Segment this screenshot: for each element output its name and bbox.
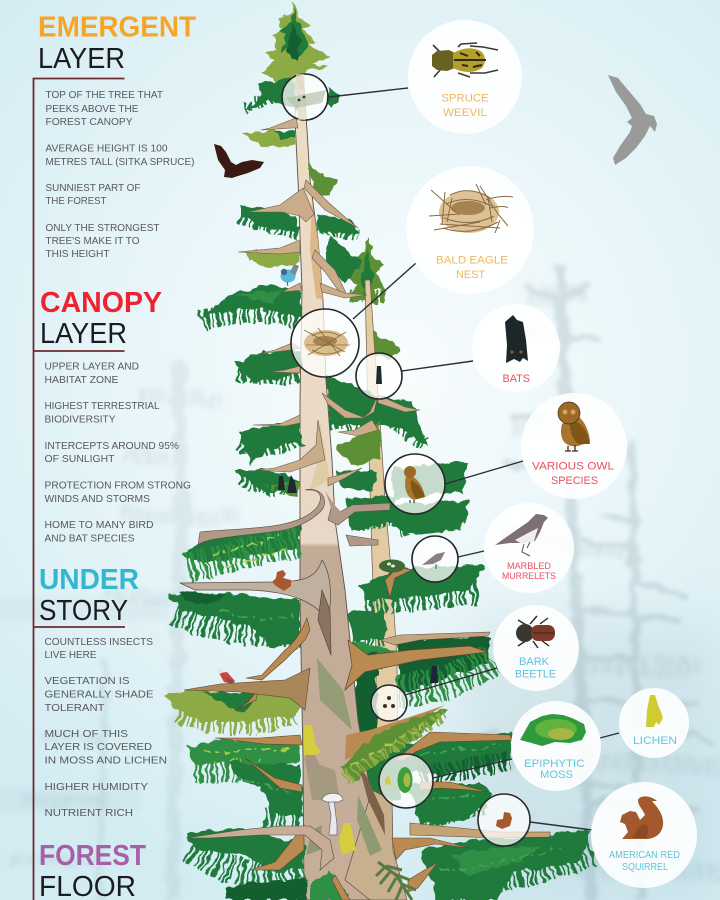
icon: small blue bird bbox=[280, 264, 299, 286]
text block: emergent facts: FOREST CANOPY bbox=[46, 116, 132, 128]
inset circle: murrelet bbox=[412, 536, 458, 582]
text block: emergent facts: THIS HEIGHT bbox=[46, 248, 110, 260]
heading: forest floor: FOREST bbox=[39, 840, 146, 872]
text block: canopy facts: HABITAT ZONE bbox=[44, 374, 118, 386]
callout: bats bbox=[472, 304, 560, 392]
text block: canopy facts: INTERCEPTS AROUND 95% bbox=[44, 440, 179, 452]
callout: spruce weevil bbox=[408, 20, 522, 134]
text block: canopy facts: UPPER LAYER AND bbox=[44, 360, 139, 372]
icon: nest with eggs on secondary tree bbox=[379, 560, 405, 572]
text block: emergent facts: PEEKS ABOVE THE bbox=[46, 103, 138, 115]
callout: bark beetle: BARK bbox=[519, 656, 550, 668]
moss patch branch bracket bbox=[360, 770, 385, 835]
callout: marbled murrelets: MURRELETS bbox=[502, 571, 556, 582]
text block: canopy facts: OF SUNLIGHT bbox=[44, 453, 115, 465]
text block: emergent facts: METRES TALL (SITKA SPRUCE) bbox=[46, 156, 194, 168]
callout: epiphytic moss: MOSS bbox=[540, 769, 573, 781]
callout: lichen bbox=[619, 688, 689, 758]
icon: lichen on trunk bbox=[304, 725, 356, 855]
callout: american red squirrel bbox=[591, 782, 697, 888]
icon: grey bird silhouette bbox=[608, 75, 657, 165]
text block: canopy facts: PROTECTION FROM STRONG bbox=[44, 480, 191, 492]
foliage: right side of main tree behind trunk bbox=[325, 235, 485, 670]
icon: moss bbox=[520, 714, 586, 746]
inset circle: moss and lichen bbox=[379, 754, 433, 808]
icon: squirrel bbox=[620, 796, 663, 839]
trunk patches bbox=[304, 200, 382, 856]
heading: canopy layer bbox=[40, 287, 162, 350]
text block: emergent facts: ONLY THE STRONGEST bbox=[46, 222, 160, 234]
icon: hanging bat on right branch bbox=[430, 666, 438, 683]
heading: understory bbox=[39, 564, 139, 627]
callout: marbled murrelets: MARBLED bbox=[507, 561, 551, 572]
main trunk bbox=[295, 88, 404, 900]
text block: canopy facts: WINDS AND STORMS bbox=[44, 493, 150, 505]
text block: emergent facts: TREE'S MAKE IT TO bbox=[46, 235, 140, 247]
heading: understory: UNDER bbox=[39, 564, 139, 596]
callout: bald eagle nest bbox=[406, 166, 534, 294]
callout: epiphytic moss: EPIPHYTIC bbox=[524, 758, 585, 770]
inset circle: owl bbox=[385, 454, 445, 514]
icon: fern bbox=[376, 862, 416, 900]
foliage: upper left and right bbox=[200, 205, 358, 498]
text block: understory facts: NUTRIENT RICH bbox=[44, 807, 133, 819]
text block: understory facts: GENERALLY SHADE bbox=[44, 688, 154, 700]
background misty trees bbox=[0, 265, 720, 900]
text block: canopy facts: HOME TO MANY BIRD bbox=[44, 519, 154, 531]
inset circle: bat bbox=[356, 353, 402, 399]
text block: understory facts bbox=[44, 636, 167, 819]
text block: understory facts: MUCH OF THIS bbox=[44, 728, 128, 740]
section rule: canopy bbox=[34, 350, 124, 352]
foliage: lower left bbox=[165, 522, 348, 900]
icon: hanging bat bbox=[505, 315, 528, 363]
text block: canopy facts: AND BAT SPECIES bbox=[44, 532, 134, 544]
text block: understory facts: COUNTLESS INSECTS bbox=[44, 636, 153, 648]
callout: spruce weevil: SPRUCE bbox=[442, 92, 488, 104]
secondary tree bbox=[348, 235, 402, 800]
icon: lichen bbox=[646, 695, 663, 727]
text block: emergent facts bbox=[46, 89, 194, 260]
callout: bats: BATS bbox=[502, 373, 530, 385]
callout: lichen: LICHEN bbox=[633, 735, 677, 747]
inset circle: bark beetles bbox=[371, 685, 407, 721]
trunk lower right buttress bbox=[345, 790, 407, 900]
icon: murrelet bbox=[495, 514, 548, 556]
heading: emergent layer: LAYER bbox=[38, 43, 125, 75]
icon: nest bbox=[429, 184, 513, 233]
icon: owl bbox=[558, 402, 590, 451]
text block: understory facts: HIGHER HUMIDITY bbox=[44, 781, 148, 793]
callout: various owl species: SPECIES bbox=[551, 475, 598, 487]
text block: understory facts: TOLERANT bbox=[44, 702, 105, 714]
text block: emergent facts: THE FOREST bbox=[46, 195, 107, 207]
heading: emergent layer: EMERGENT bbox=[38, 12, 196, 44]
section rule: understory bbox=[34, 626, 125, 628]
branches bbox=[180, 118, 550, 900]
callout: various owl species bbox=[521, 393, 627, 499]
text block: understory facts: IN MOSS AND LICHEN bbox=[44, 754, 167, 766]
callout: bald eagle nest: BALD EAGLE bbox=[436, 254, 508, 266]
callout: american red squirrel: SQUIRREL bbox=[622, 862, 668, 873]
icon: red bird bbox=[217, 668, 235, 684]
callout: bark beetle bbox=[493, 605, 579, 691]
callout: bald eagle nest: NEST bbox=[456, 269, 485, 281]
text block: emergent facts: TOP OF THE TREE THAT bbox=[46, 89, 164, 101]
callout: various owl species: VARIOUS OWL bbox=[532, 460, 614, 472]
section rule: left bracket bbox=[34, 78, 124, 900]
text block: canopy facts: HIGHEST TERRESTRIAL bbox=[44, 400, 160, 412]
heading: canopy layer: LAYER bbox=[40, 318, 127, 350]
background haze lower right bbox=[440, 620, 720, 900]
heading: forest floor bbox=[39, 840, 146, 900]
text block: understory facts: LAYER IS COVERED bbox=[44, 741, 152, 753]
callout: marbled murrelets bbox=[484, 503, 574, 593]
heading: understory: STORY bbox=[39, 595, 128, 627]
text block: canopy facts: BIODIVERSITY bbox=[44, 414, 116, 426]
callout: epiphytic moss bbox=[511, 701, 601, 791]
text block: canopy facts bbox=[44, 360, 191, 544]
callout: american red squirrel: AMERICAN RED bbox=[609, 850, 680, 861]
icon: hanging bats on branch bbox=[278, 475, 297, 493]
text block: emergent facts: SUNNIEST PART OF bbox=[46, 182, 140, 194]
icon: mushroom bbox=[322, 793, 343, 835]
callout: spruce weevil: WEEVIL bbox=[443, 107, 487, 119]
icon: weevil bbox=[432, 43, 498, 77]
icon: bald eagle in flight bbox=[214, 144, 264, 178]
inset circle: squirrel bbox=[478, 794, 530, 846]
icon: squirrel on branch bbox=[272, 570, 291, 591]
icon: bark beetle bbox=[516, 616, 555, 648]
inset circle: weevil on tree bbox=[282, 74, 328, 120]
text block: emergent facts: AVERAGE HEIGHT IS 100 bbox=[46, 142, 168, 154]
callout: bark beetle: BEETLE bbox=[515, 668, 556, 680]
leader lines bbox=[329, 88, 619, 830]
heading: emergent layer bbox=[38, 12, 196, 75]
foliage: lower right bbox=[355, 635, 592, 900]
inset circle: eagle nest bbox=[291, 309, 359, 377]
text block: understory facts: VEGETATION IS bbox=[44, 675, 130, 687]
text block: understory facts: LIVE HERE bbox=[44, 649, 96, 661]
foliage: crown top bbox=[241, 2, 340, 196]
heading: canopy layer: CANOPY bbox=[40, 287, 162, 319]
